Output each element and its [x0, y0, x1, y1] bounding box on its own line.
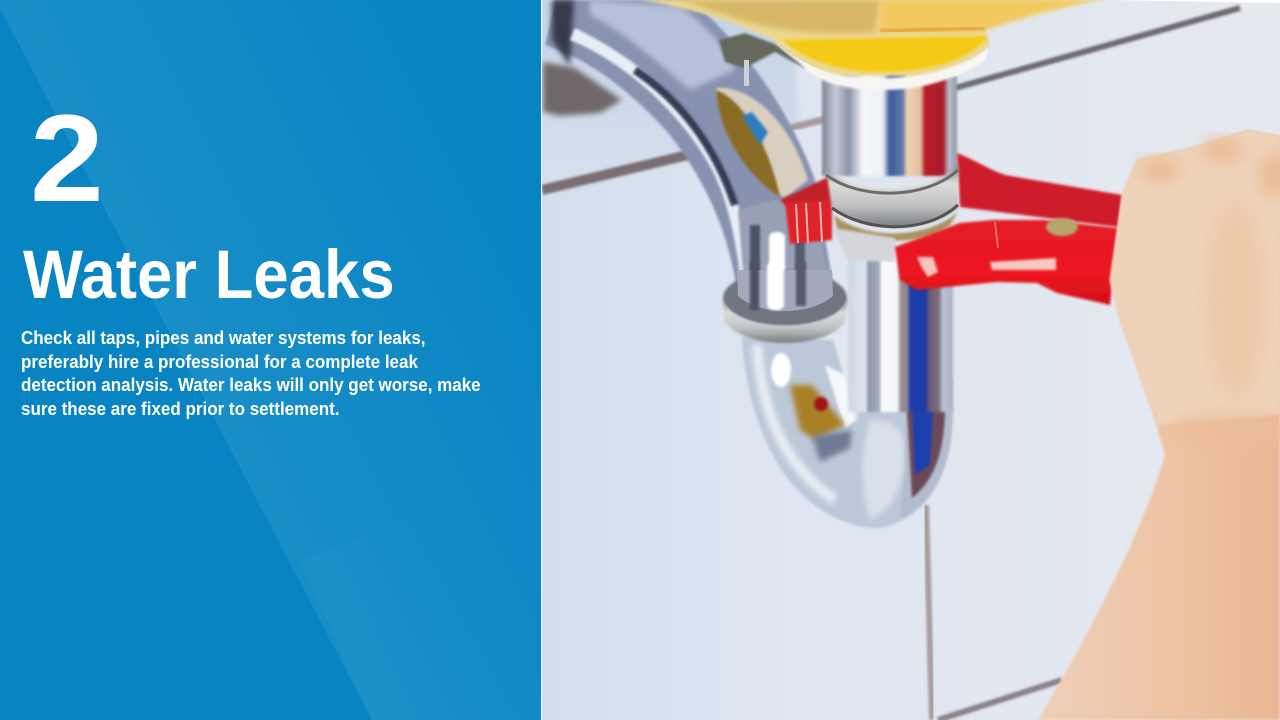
wrench rivet [1046, 218, 1078, 236]
wrench near jaw and handle [895, 218, 1118, 305]
panel: blue text panel [0, 0, 541, 720]
body text: preferably hire a professional for a complete leak [21, 352, 418, 372]
threaded collars [826, 165, 958, 262]
upper straight pipe [822, 76, 957, 176]
wrench small thumbwheel [780, 176, 834, 244]
number: 2 [30, 90, 104, 228]
heading: Water Leaks [23, 236, 395, 313]
left collar [723, 262, 847, 343]
body text [21, 328, 481, 419]
body text: detection analysis. Water leaks will only get worse, make [21, 375, 481, 395]
basin rim over pipe [800, 52, 985, 90]
hand and forearm [1038, 130, 1280, 720]
body text: sure these are fixed prior to settlement. [21, 398, 339, 418]
photo: hand tightening a chrome sink trap with a red wrench [542, 0, 1280, 720]
lower straight pipe [848, 250, 953, 412]
sink basin [640, 0, 1110, 86]
clip on tailpiece [719, 33, 808, 86]
wrench far jaw [957, 153, 1122, 227]
wall flange shadow [543, 62, 622, 116]
curved trap arm [545, 0, 835, 296]
tiled wall [542, 0, 1280, 720]
body text: Check all taps, pipes and water systems for leaks, [21, 328, 426, 348]
U-bend [742, 335, 953, 528]
